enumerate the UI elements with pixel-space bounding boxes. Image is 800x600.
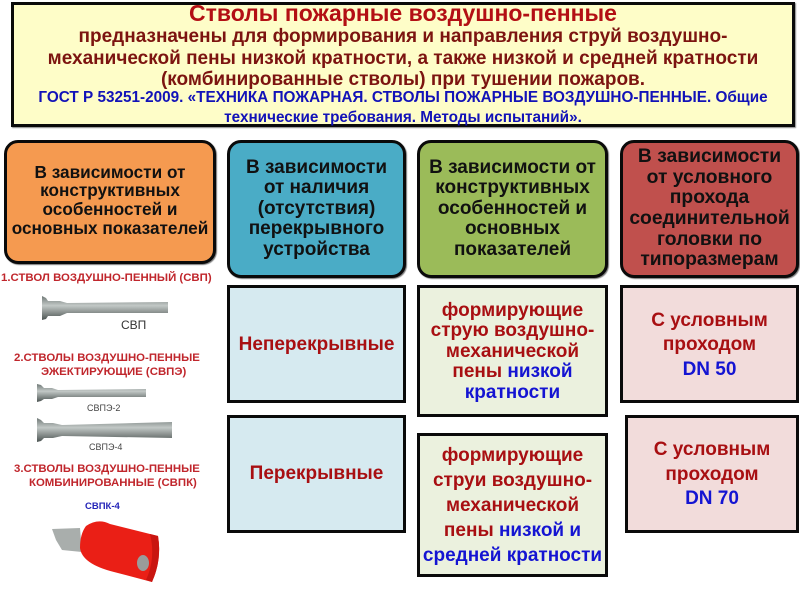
header: red nominal passage: В зависимости [638,146,781,167]
card: DN 70 [625,415,799,533]
description text [48,26,758,90]
header: green design features [417,140,608,278]
icon: SVPE-2 nozzle [37,384,146,402]
label: SVP: СВП [121,318,146,332]
header: green design features: показателей [454,239,571,260]
card: low expansion foam: формирующие [442,300,583,321]
header: blue shutoff device: (отсутствия) [258,198,375,219]
card: low expansion foam [417,285,608,417]
header: green design features: конструктивных [435,177,590,198]
header: red nominal passage: прохода [670,187,749,208]
card: low and medium expansion foam [417,433,608,577]
header: blue shutoff device: В зависимости [246,157,387,178]
card: DN 70: DN 70 [685,488,739,509]
card: low expansion foam: механической [446,341,579,362]
header: orange design features: особенностей и [42,199,177,219]
header: orange design features: основных показателей [12,218,208,238]
label: type 2: ЭЖЕКТИРУЮЩИЕ (СВПЭ) [41,366,186,378]
title: Стволы пожарные воздушно-пенные [189,0,617,26]
label: type 3 [14,463,200,489]
description text: предназначены для формирования и направления струй воздушно- [79,26,727,47]
card: low and medium expansion foam: пены низкой и [444,520,581,540]
card: low expansion foam: струю воздушно- [431,320,594,341]
icon: SVPK-4 combined nozzle [52,521,160,582]
header: red nominal passage: от условного [647,167,772,188]
header: green design features: особенностей и [438,198,587,219]
card: low expansion foam: пены низкой [452,361,573,382]
card: shutoff: Перекрывные [250,463,383,484]
panel: title block [11,2,795,127]
header: orange design features: В зависимости от [35,162,185,182]
card: DN 50 [620,285,799,403]
label: SVPE-4: СВПЭ-4 [89,442,122,452]
card: low expansion foam: кратности [465,382,560,403]
label: type 2 [14,352,200,378]
header: red nominal passage: типоразмерам [640,249,779,270]
header: blue shutoff device: устройства [263,239,370,260]
header: red nominal passage: соединительной [629,208,790,229]
header: blue shutoff device: от наличия [264,177,369,198]
header: blue shutoff device [227,140,406,278]
card: DN 50: DN 50 [683,359,736,380]
header: green design features: В зависимости от [429,157,596,178]
label: type 3: КОМБИНИРОВАННЫЕ (СВПК) [29,477,197,489]
label: SVPE-2: СВПЭ-2 [87,403,120,413]
header: red nominal passage [620,140,799,278]
icon: SVP nozzle [42,296,168,320]
label: SVPK-4: СВПК-4 [85,501,120,512]
card: DN 50: С условным [651,310,768,331]
card: DN 70: С условным [654,439,770,460]
standard reference text: ГОСТ Р 53251-2009. «ТЕХНИКА ПОЖАРНАЯ. СТВОЛЫ ПОЖАРНЫЕ ВОЗДУШНО-ПЕННЫЕ. Общие [38,89,768,106]
header: orange design features [4,140,216,264]
panel: nozzle types [1,271,212,582]
card: shutoff [227,415,406,533]
description text: механической пены низкой кратности, а также низкой и средней кратности [48,48,758,68]
card: non-shutoff [227,285,406,403]
card: non-shutoff: Неперекрывные [239,334,394,355]
header: red nominal passage: головки по [657,229,762,250]
label: type 2: 2.СТВОЛЫ ВОЗДУШНО-ПЕННЫЕ [14,352,200,364]
card: low and medium expansion foam: формирующие [442,444,583,466]
card: low and medium expansion foam: струи воздушно- [433,470,592,490]
header: blue shutoff device: перекрывного [249,218,384,239]
standard reference text [38,89,768,126]
icon: SVPE-4 nozzle [37,418,172,442]
card: DN 70: проходом [665,464,759,485]
card: DN 50: проходом [663,334,756,355]
header: green design features: основных [465,218,560,239]
card: low and medium expansion foam: средней кратности [423,544,602,566]
description text: (комбинированные стволы) при тушении пожаров. [161,69,645,90]
standard reference text: технические требования. Методы испытаний». [224,109,582,126]
label: type 1: 1.СТВОЛ ВОЗДУШНО-ПЕННЫЙ (СВП) [1,272,212,284]
label: type 3: 3.СТВОЛЫ ВОЗДУШНО-ПЕННЫЕ [14,463,200,475]
card: low and medium expansion foam: механической [446,494,579,516]
header: orange design features: конструктивных [40,180,180,200]
